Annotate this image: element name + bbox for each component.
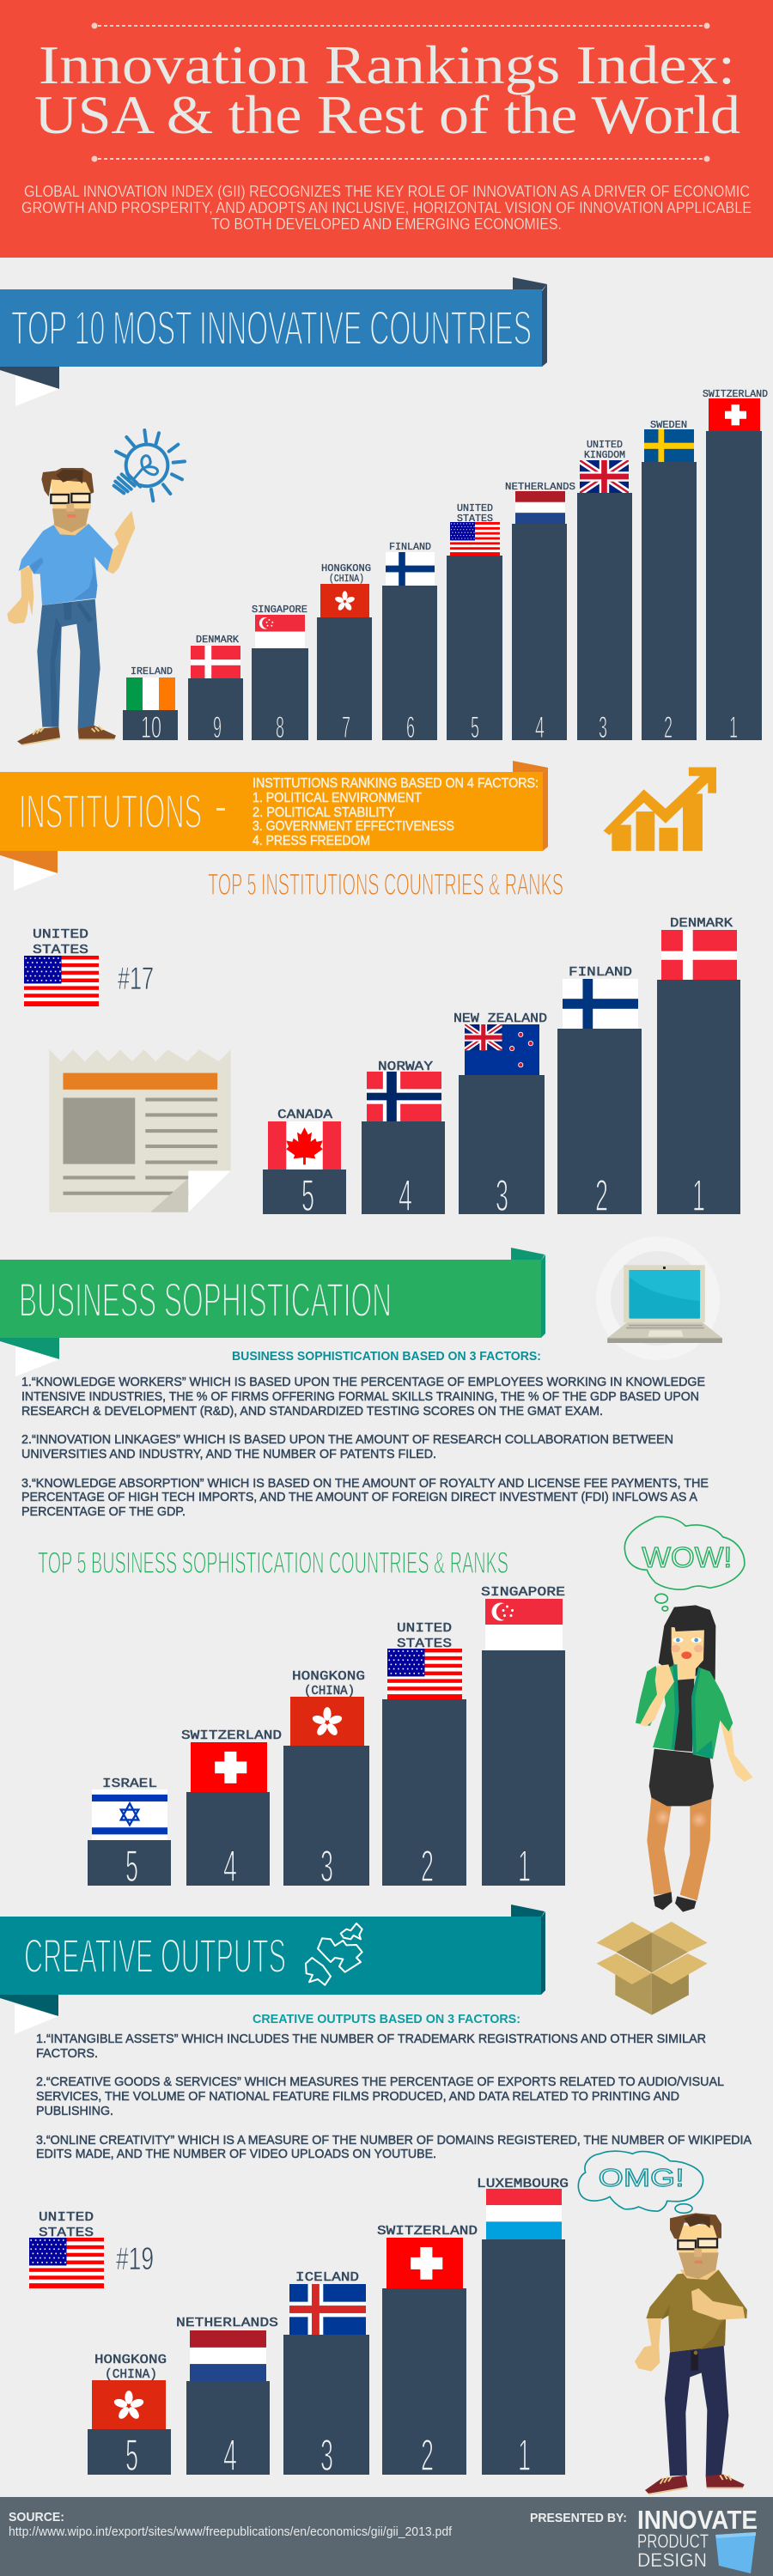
bar: Luxembourg rank 1 (477, 2177, 569, 2481)
factors body: PUBLISHING. (36, 2105, 113, 2118)
factors list: 2. POLITICAL STABILITY (253, 805, 395, 820)
bar: United States rank 2: STATES (397, 1637, 452, 1651)
bar: Hong Kong rank 5 (88, 2353, 171, 2481)
source (9, 2510, 453, 2539)
bar: Finland rank 6: FINLAND (389, 541, 431, 553)
icon: newspaper (49, 1049, 231, 1212)
bar: Singapore rank 8: 8 (276, 711, 284, 744)
bar: United States rank 2: 2 (421, 1842, 434, 1892)
bar: Norway rank 4 (362, 1060, 445, 1221)
bar: Switzerland rank 4: SWITZERLAND (181, 1728, 282, 1743)
bar: United States rank 5: STATES (457, 513, 493, 525)
factors body: 1.“INTANGIBLE ASSETS” WHICH INCLUDES THE NUMBER OF TRADEMARK REGISTRATIONS AND OTHER SIMILAR (36, 2032, 706, 2046)
bar: New Zealand rank 3: 3 (496, 1171, 508, 1221)
bar: Switzerland rank 1: 1 (729, 711, 738, 744)
bar: Ireland rank 10 (123, 665, 178, 744)
logo: Innovate Product Design (637, 2505, 758, 2573)
bar: Switzerland rank 2: 2 (421, 2431, 434, 2481)
bar: Sweden rank 2 (642, 419, 697, 744)
logo: Innovate Product Design: INNOVATE (637, 2505, 758, 2535)
dash (216, 808, 225, 811)
bar: Switzerland rank 2 (377, 2224, 478, 2481)
bar: Israel rank 5 (88, 1777, 171, 1892)
factors body: 3.“ONLINE CREATIVITY” WHICH IS A MEASURE OF THE NUMBER OF DOMAINS REGISTERED, THE NUMBER OF WIKIPEDIA (36, 2134, 752, 2148)
bar: Ireland rank 10: IRELAND (131, 665, 173, 677)
callout: United States rank 19 (29, 2210, 154, 2288)
factors body: RESEARCH & DEVELOPMENT (R&D), AND STANDARDIZED TESTING SCORES ON THE GMAT EXAM. (21, 1405, 603, 1419)
panel: creative outputs banner (0, 1905, 545, 2034)
factors list: 4. PRESS FREEDOM (253, 834, 370, 848)
factors body: FACTORS. (36, 2047, 98, 2061)
factors list (253, 776, 539, 848)
factors body: 2.“INNOVATION LINKAGES” WHICH IS BASED UPON THE AMOUNT OF RESEARCH COLLABORATION BETWEEN (21, 1433, 673, 1447)
bar: Canada rank 5 (263, 1108, 346, 1221)
factors body: SERVICES, THE VOLUME OF NATIONAL FEATURE FILMS PRODUCED, AND DATA RELATED TO PRINTING AND (36, 2090, 679, 2104)
bar: Sweden rank 2: SWEDEN (650, 419, 687, 431)
bar: Ireland rank 10: 10 (141, 711, 161, 744)
bar: United Kingdom rank 3: KINGDOM (584, 449, 625, 461)
bar: Singapore rank 1 (481, 1585, 565, 1892)
icon: growth chart (604, 767, 716, 851)
banner heading: BUSINESS SOPHISTICATION (19, 1273, 392, 1327)
bar: Switzerland rank 1: SWITZERLAND (703, 388, 768, 400)
banner heading: CREATIVE OUTPUTS (24, 1929, 286, 1983)
thought cloud: OMG: OMG! (599, 2165, 685, 2192)
icon: cardboard box (597, 1922, 708, 2015)
factors body: PERCENTAGE OF THE GDP. (21, 1505, 186, 1519)
bar: Netherlands rank 4: 4 (223, 2431, 237, 2481)
thought cloud: WOW (624, 1516, 745, 1611)
bar: Netherlands rank 4: NETHERLANDS (505, 481, 575, 493)
bar: Norway rank 4: 4 (399, 1171, 412, 1221)
factors list: INSTITUTIONS RANKING BASED ON 4 FACTORS: (253, 776, 539, 791)
bar: Sweden rank 2: 2 (664, 711, 673, 744)
factors body: 2.“CREATIVE GOODS & SERVICES” WHICH MEASURES THE PERCENTAGE OF EXPORTS RELATED TO AUDIO/VISUAL (36, 2075, 724, 2089)
bar: Hong Kong rank 5: (CHINA) (105, 2367, 157, 2382)
bar: Netherlands rank 4: NETHERLANDS (176, 2316, 278, 2330)
bar: Denmark rank 9 (188, 634, 243, 744)
bar: Switzerland rank 2: SWITZERLAND (377, 2224, 478, 2239)
bar: Israel rank 5: 5 (125, 1842, 138, 1892)
banner heading: INSTITUTIONS (19, 784, 202, 838)
bar: New Zealand rank 3 (453, 1012, 547, 1221)
bar: United States rank 2 (382, 1621, 466, 1892)
bar: Switzerland rank 4: 4 (223, 1842, 237, 1892)
bar: Luxembourg rank 1: 1 (518, 2431, 531, 2481)
factors heading: CREATIVE OUTPUTS BASED ON 3 FACTORS: (253, 2012, 520, 2026)
bar chart: top 5 business sophistication (88, 1585, 565, 1892)
bar: Denmark rank 9: DENMARK (196, 634, 240, 646)
text block: business factors (21, 1349, 709, 1519)
title (34, 34, 740, 145)
bar: Luxembourg rank 1: LUXEMBOURG (477, 2177, 569, 2191)
bar: Iceland rank 3: 3 (320, 2431, 333, 2481)
bar: United States rank 2: UNITED (397, 1621, 452, 1636)
bar: Hong Kong rank 5: HONGKONG (94, 2353, 167, 2367)
bar chart: top 5 institutions (263, 916, 740, 1221)
panel: header (0, 0, 773, 258)
bar: Hong Kong rank 3: HONGKONG (292, 1669, 365, 1684)
callout: United States rank 19: UNITED (39, 2210, 94, 2225)
factors list: 1. POLITICAL ENVIRONMENT (253, 791, 422, 805)
bar: Singapore rank 8: SINGAPORE (252, 604, 307, 616)
bar: Netherlands rank 4 (176, 2316, 278, 2481)
thought cloud: WOW: WOW! (642, 1542, 732, 1574)
factors body: PERCENTAGE OF HIGH TECH IMPORTS, AND THE AMOUNT OF FOREIGN DIRECT INVESTMENT (FDI) INFLOWS AS A (21, 1491, 697, 1504)
bar: Canada rank 5: 5 (301, 1171, 314, 1221)
bar: Hong Kong rank 5: 5 (125, 2431, 138, 2481)
illustration: man in olive shirt with OMG thought cloud (578, 2151, 747, 2494)
bar: Norway rank 4: NORWAY (378, 1060, 433, 1074)
factors body (21, 1376, 709, 1519)
title: Innovation Rankings Index: (39, 34, 735, 95)
bar: New Zealand rank 3: NEW ZEALAND (453, 1012, 547, 1026)
bar: Hong Kong rank 7: 7 (342, 711, 350, 744)
logo: Innovate Product Design: DESIGN (637, 2549, 707, 2571)
source: SOURCE: (9, 2510, 64, 2524)
logo: Innovate Product Design: PRODUCT (637, 2530, 709, 2552)
source: http://www.wipo.int/export/sites/www/freepublications/en/economics/gii/gii_2013.pdf (9, 2524, 453, 2539)
bar: United Kingdom rank 3: 3 (599, 711, 607, 744)
title: USA & the Rest of the World (34, 84, 740, 145)
factors body: EDITS MADE, AND THE NUMBER OF VIDEO UPLOADS ON YOUTUBE. (36, 2148, 436, 2161)
bar: Switzerland rank 1 (703, 388, 768, 744)
bar: Canada rank 5: CANADA (277, 1108, 332, 1122)
bar: Finland rank 2: 2 (595, 1171, 608, 1221)
thought cloud: OMG (578, 2151, 703, 2213)
callout: United States rank 17 (24, 927, 154, 1006)
factors body: INTENSIVE INDUSTRIES, THE % OF FIRMS OFFERING FORMAL SKILLS TRAINING, THE % OF THE GDP BASED UPON (21, 1390, 699, 1404)
bar: United Kingdom rank 3 (577, 439, 632, 744)
panel: institutions banner (0, 761, 548, 890)
bar: Finland rank 6 (382, 541, 437, 744)
panel: top 10 banner (0, 277, 547, 406)
bar: Finland rank 6: 6 (406, 711, 415, 744)
panel: footer (0, 2497, 773, 2576)
intro text: TO BOTH DEVELOPED AND EMERGING ECONOMIES. (211, 216, 562, 233)
bar: Hong Kong rank 3: (CHINA) (304, 1684, 355, 1698)
bar: Singapore rank 1: SINGAPORE (481, 1585, 565, 1600)
bar chart: top 10 most innovative countries (123, 388, 768, 744)
icon: lightbulb (114, 430, 185, 501)
bar: Denmark rank 9: 9 (213, 711, 222, 744)
bar: United States rank 5 (447, 502, 502, 744)
bar: Hong Kong rank 7: (CHINA) (329, 573, 364, 585)
panel: business sophistication banner (0, 1248, 545, 1376)
presented by: PRESENTED BY: (530, 2511, 627, 2525)
bar: Netherlands rank 4: 4 (535, 711, 545, 744)
bar: Singapore rank 1: 1 (518, 1842, 531, 1892)
illustration: woman with wow thought cloud (624, 1516, 753, 1912)
bar: United States rank 5: UNITED (457, 502, 493, 514)
factors body: 3.“KNOWLEDGE ABSORPTION” WHICH IS BASED ON THE AMOUNT OF ROYALTY AND LICENSE FEE PAYMENTS, THE (21, 1477, 709, 1491)
illustration: man in blue shirt (7, 468, 135, 745)
bar: Finland rank 2 (557, 965, 642, 1221)
bar: United Kingdom rank 3: UNITED (587, 439, 623, 451)
bar chart: top 5 creative outputs (88, 2177, 569, 2481)
bar: Denmark rank 1: DENMARK (670, 916, 733, 931)
bar: Denmark rank 1 (657, 916, 740, 1221)
factors list: 3. GOVERNMENT EFFECTIVENESS (253, 819, 454, 834)
bar: Iceland rank 3 (283, 2270, 369, 2481)
bar: Switzerland rank 4 (181, 1728, 282, 1892)
icon: puzzle pieces (306, 1923, 362, 1985)
bar: Hong Kong rank 7: HONGKONG (321, 562, 371, 574)
callout: United States rank 17: UNITED (33, 927, 88, 942)
factors body (36, 2032, 752, 2161)
bar: Israel rank 5: ISRAEL (102, 1777, 157, 1791)
callout: United States rank 17: #17 (118, 961, 154, 996)
factors body: 1.“KNOWLEDGE WORKERS” WHICH IS BASED UPON THE PERCENTAGE OF EMPLOYEES WORKING IN KNOWLEDGE (21, 1376, 705, 1389)
bar: Finland rank 2: FINLAND (569, 965, 632, 980)
bar: Hong Kong rank 7 (317, 562, 372, 744)
bar: Denmark rank 1: 1 (692, 1171, 705, 1221)
text block: creative factors (36, 2012, 752, 2161)
bar: United States rank 5: 5 (471, 711, 479, 744)
icon: laptop (596, 1236, 722, 1360)
bar: Hong Kong rank 3 (283, 1669, 369, 1892)
factors heading: BUSINESS SOPHISTICATION BASED ON 3 FACTORS: (232, 1349, 541, 1364)
callout: United States rank 19: #19 (116, 2241, 154, 2276)
callout: United States rank 19: STATES (39, 2226, 94, 2240)
bar: Iceland rank 3: ICELAND (295, 2270, 359, 2285)
intro text (21, 183, 752, 233)
bar: Netherlands rank 4 (505, 481, 575, 744)
factors body: UNIVERSITIES AND INDUSTRY, AND THE NUMBER OF PATENTS FILED. (21, 1448, 436, 1461)
bar: Singapore rank 8 (252, 604, 308, 744)
bar: Hong Kong rank 3: 3 (320, 1842, 333, 1892)
callout: United States rank 17: STATES (33, 943, 88, 957)
